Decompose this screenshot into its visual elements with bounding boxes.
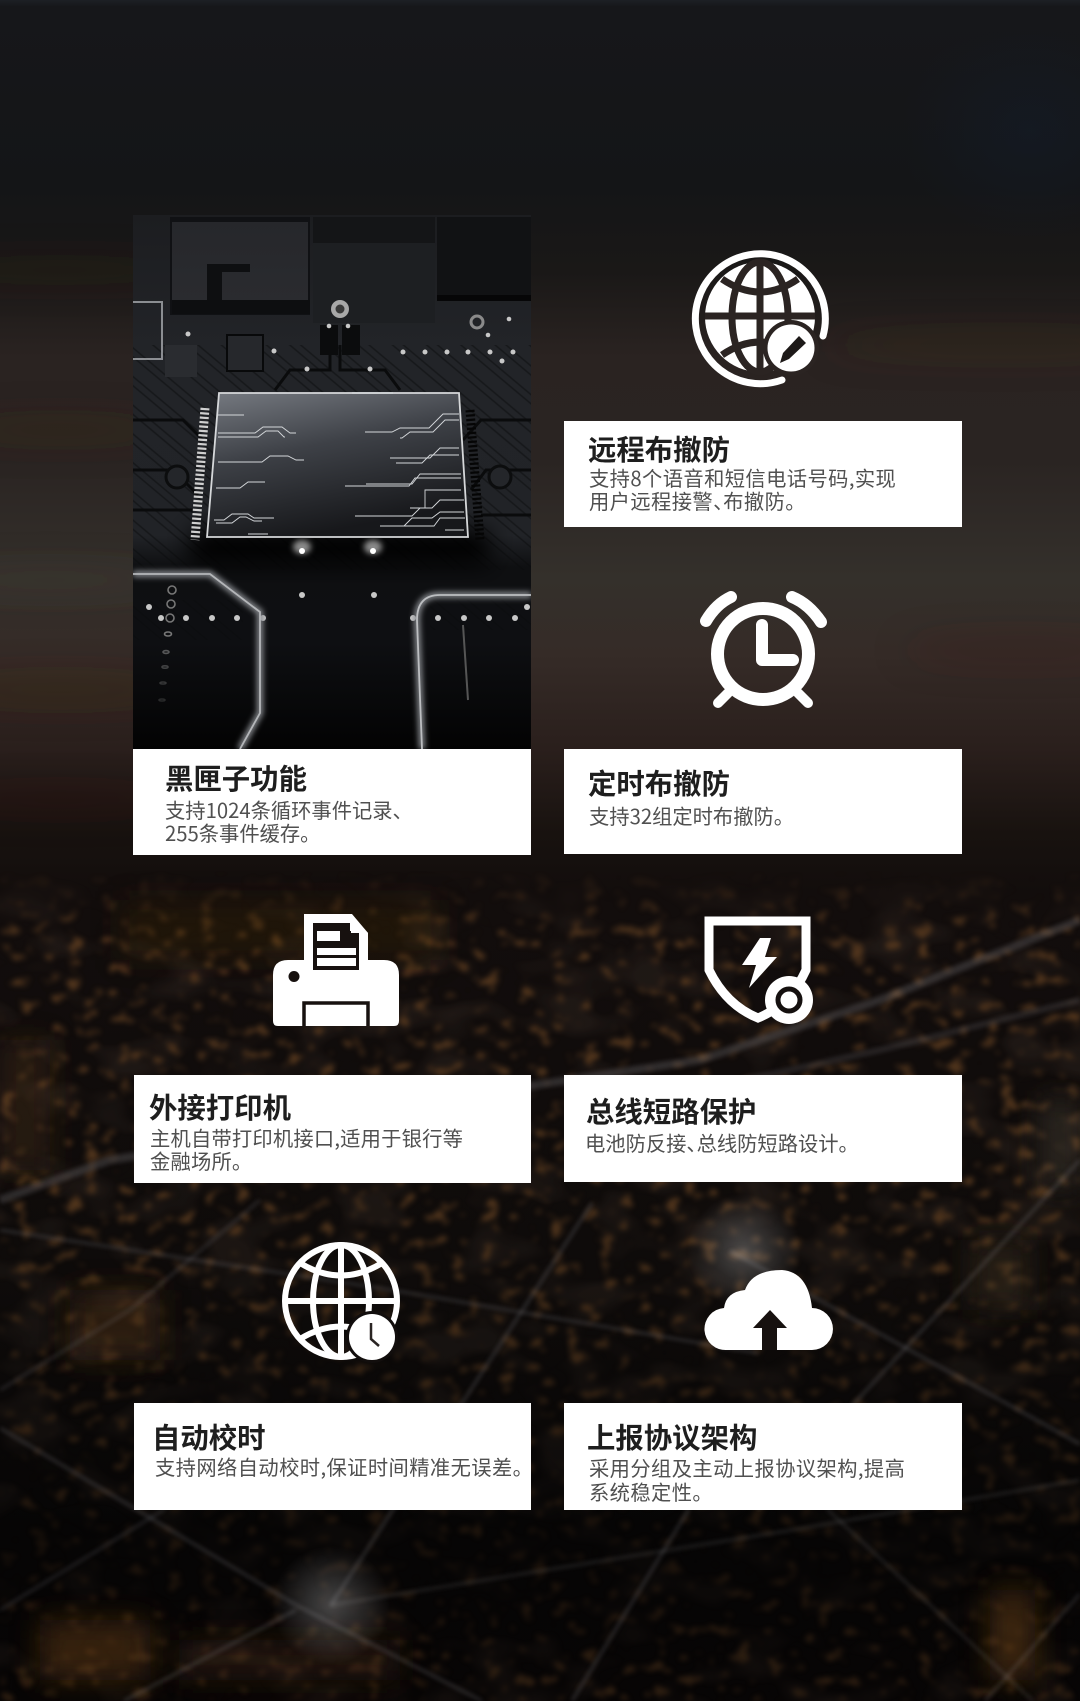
heading: 定时布撤防: [588, 762, 730, 803]
card: 黑匣子功能: [133, 749, 531, 855]
icon: alarm clock: [706, 597, 821, 703]
text: 用户远程接警、布撤防。: [589, 485, 806, 515]
card: 上报协议架构: [564, 1403, 962, 1510]
text: 主机自带打印机接口,适用于银行等: [150, 1122, 463, 1152]
glowing circuit lines: [133, 574, 531, 749]
heading: 上报协议架构: [587, 1416, 757, 1457]
text: 支持网络自动校时,保证时间精准无误差。: [155, 1451, 533, 1481]
icon: globe with clock: [285, 1245, 398, 1363]
via column: [159, 586, 176, 701]
chip traces: [214, 393, 465, 534]
left pins: [195, 408, 205, 540]
heading: 远程布撤防: [588, 428, 730, 469]
text: 电池防反接、总线防短路设计。: [585, 1127, 859, 1157]
text: [150, 1122, 463, 1175]
photo base: [133, 215, 531, 749]
text: 支持32组定时布撤防。: [589, 800, 794, 830]
board dots: [146, 317, 530, 621]
heading: 自动校时: [152, 1416, 266, 1457]
card: 定时布撤防: [564, 749, 962, 854]
text: [589, 1452, 905, 1506]
background: road network lines: [0, 920, 1080, 1701]
right pins: [470, 410, 480, 540]
text: 255条事件缓存。: [165, 817, 320, 847]
card: 外接打印机: [134, 1075, 531, 1183]
icon: globe with pencil: [695, 254, 825, 384]
text: 支持8个语音和短信电话号码,实现: [589, 462, 896, 492]
glowing outline left: [133, 302, 162, 359]
text: [589, 462, 896, 515]
text: 系统稳定性。: [589, 1476, 713, 1506]
background: city lights: [0, 870, 1080, 1701]
icon: cloud upload: [704, 1270, 833, 1350]
chip underside lights: [293, 540, 382, 554]
text: [165, 794, 413, 847]
photo: circuit board chip: [133, 215, 531, 749]
text: 采用分组及主动上报协议架构,提高: [589, 1452, 905, 1482]
chip glass: [207, 393, 468, 537]
card: 总线短路保护: [564, 1075, 962, 1182]
heading: 外接打印机: [149, 1086, 291, 1127]
card: 自动校时: [134, 1403, 531, 1510]
top components: [165, 217, 531, 377]
background: warm haze patches: [0, 900, 1080, 1680]
chip shadow: [190, 530, 490, 565]
heading: 黑匣子功能: [165, 757, 307, 798]
board traces: [133, 345, 531, 640]
text: 支持1024条循环事件记录、: [165, 794, 413, 824]
icon: printer: [273, 914, 399, 1026]
icon: shield with bolt: [709, 921, 813, 1024]
heading: 总线短路保护: [586, 1090, 756, 1131]
card: 远程布撤防: [564, 421, 962, 527]
text: 金融场所。: [150, 1145, 252, 1175]
